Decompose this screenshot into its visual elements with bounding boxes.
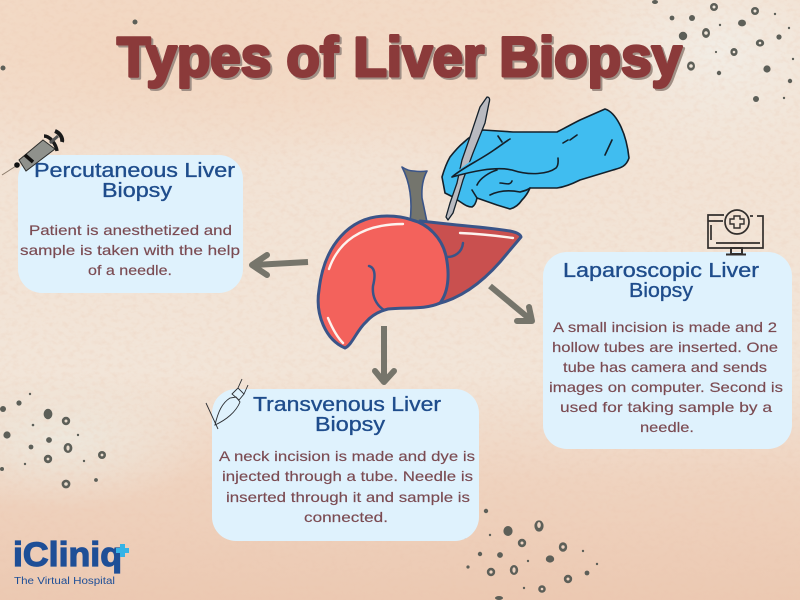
text: percutaneous description: sample is taken with the help [20, 242, 240, 258]
glove [442, 109, 629, 209]
text: laparoscopic description: A small incision is made and 2 [553, 319, 777, 335]
text: laparoscopic description: needle. [640, 419, 694, 435]
icon: liver [318, 167, 521, 348]
vessel [402, 167, 427, 222]
heading: transvenous: Biopsy [315, 414, 385, 436]
decorative speckles: bottom centre [462, 509, 598, 600]
heading: laparoscopic [563, 260, 759, 302]
heading: laparoscopic: Biopsy [629, 280, 693, 302]
panel: laparoscopic liver biopsy [543, 252, 792, 449]
heading: percutaneous: Biopsy [102, 180, 172, 202]
text: percutaneous description: of a needle. [88, 262, 172, 278]
heading: percutaneous [34, 160, 235, 202]
heading: laparoscopic: Laparoscopic Liver [563, 260, 759, 282]
left lobe [318, 216, 448, 348]
decorative speckles: top right [0, 0, 794, 102]
heading: percutaneous: Percutaneous Liver [34, 160, 235, 182]
title: Types of Liver Biopsy [117, 25, 682, 88]
fold lines [452, 135, 612, 198]
text: transvenous description: injected through a tube. Needle is [222, 468, 473, 484]
panel: transvenous liver biopsy [212, 389, 479, 541]
text: percutaneous description: Patient is anesthetized and [29, 222, 232, 238]
text: percutaneous description [20, 222, 240, 278]
icon: computer monitor with medical cross [708, 210, 763, 254]
title: Types of Liver Biopsy [119, 27, 684, 90]
decorative speckles: left middle [0, 393, 106, 488]
text: transvenous description: inserted through it and sample is [226, 489, 470, 505]
liver creases [369, 243, 463, 310]
text: transvenous description [219, 448, 475, 525]
text: laparoscopic description [549, 319, 783, 435]
heading: transvenous [253, 394, 441, 436]
arrow: to laparoscopic [490, 286, 532, 321]
thumb over scalpel [452, 153, 498, 177]
icon: needle catheter [206, 379, 248, 429]
text: laparoscopic description: images on computer. Second is [549, 379, 783, 395]
text: laparoscopic description: used for taking sample by a [560, 399, 772, 415]
arrow: to percutaneous [252, 255, 308, 275]
logo: iCliniq: iCliniq [13, 536, 122, 574]
logo: iCliniq [13, 536, 129, 587]
icon: syringe [2, 131, 62, 175]
text: laparoscopic description: hollow tubes are inserted. One [552, 339, 778, 355]
text: transvenous description: A neck incision is made and dye is [219, 448, 475, 464]
heading: transvenous: Transvenous Liver [253, 394, 441, 416]
scalpel [446, 97, 490, 220]
text: transvenous description: connected. [304, 509, 388, 525]
panel: percutaneous liver biopsy [18, 155, 243, 293]
arrow: to transvenous [375, 326, 394, 382]
logo: iCliniq: The Virtual Hospital [14, 576, 115, 587]
right lobe [420, 221, 521, 304]
highlights [328, 224, 513, 343]
icon: gloved hand with scalpel [442, 97, 629, 220]
text: laparoscopic description: tube has camera and sends [563, 359, 767, 375]
